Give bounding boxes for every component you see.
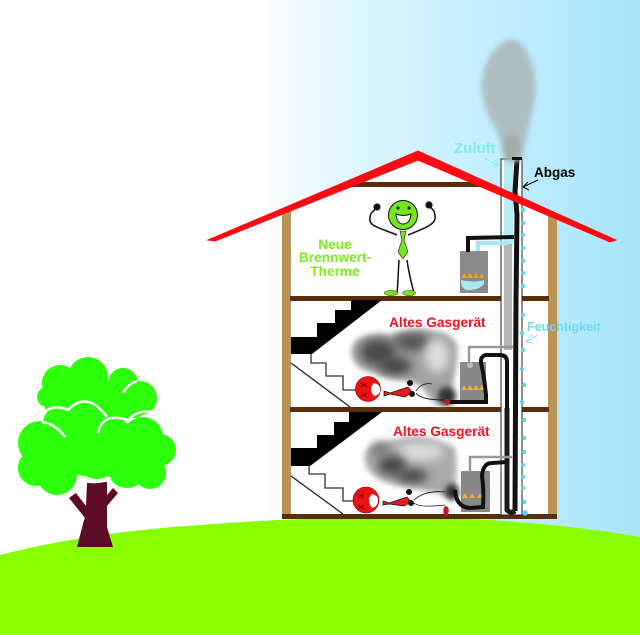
flames — [462, 493, 483, 498]
flue — [515, 159, 517, 511]
shoe — [444, 399, 450, 405]
black flue pipe — [445, 355, 507, 409]
arm — [416, 384, 445, 400]
upper-floor air pipe — [478, 243, 508, 254]
chimney — [478, 159, 522, 515]
tree trunk — [69, 482, 118, 547]
boiler body — [460, 251, 488, 293]
second flue — [507, 408, 515, 512]
tie — [383, 497, 411, 506]
ground hill — [0, 517, 640, 635]
black stair underside — [291, 412, 382, 466]
house — [282, 158, 557, 519]
sky background — [268, 0, 640, 540]
middle floor — [290, 407, 549, 412]
smoke plume — [482, 39, 536, 162]
zuluft label: Zuluft — [454, 140, 496, 157]
altes gasgerät label lower: Altes Gasgerät — [393, 424, 490, 439]
right wall — [548, 216, 557, 517]
flue cap — [512, 157, 522, 160]
head — [388, 200, 418, 230]
left wall — [282, 211, 291, 517]
condensate water — [461, 280, 484, 290]
upper floor — [290, 296, 549, 301]
heater body — [461, 471, 490, 512]
tree crown highlights — [42, 381, 155, 482]
smoke cloud — [365, 437, 459, 500]
mouth — [369, 494, 378, 508]
flames — [461, 273, 484, 278]
lower gas heater — [353, 437, 512, 516]
exhaust pipe — [468, 237, 514, 252]
legs — [397, 260, 414, 293]
arm — [414, 492, 445, 506]
moisture droplets — [520, 208, 528, 516]
neue brennwert-therme label: Therme — [310, 264, 360, 279]
dead eyes — [361, 383, 367, 397]
abgas label: Abgas — [534, 165, 575, 180]
black stair underside — [291, 300, 382, 354]
face — [356, 376, 380, 402]
altes gasgerät label upper: Altes Gasgerät — [389, 315, 486, 330]
house interior — [283, 158, 557, 517]
grey pipe — [470, 457, 512, 472]
face — [353, 487, 379, 513]
red body — [356, 376, 450, 405]
hands — [406, 489, 412, 495]
tie — [384, 387, 412, 397]
grey pipe — [469, 347, 513, 363]
stair outline — [311, 354, 356, 390]
upper staircase — [291, 300, 382, 407]
stick figure — [370, 200, 435, 296]
chimney body — [501, 159, 522, 515]
chimney air duct — [504, 160, 513, 245]
smile — [396, 214, 411, 224]
stair diagonal — [291, 363, 350, 407]
zuluft arrow — [484, 158, 499, 166]
abgas arrow — [523, 180, 538, 190]
feuchtigkeit label: Feuchtigkeit — [527, 320, 601, 334]
neue brennwert-therme label: Neue — [318, 237, 352, 252]
hands — [373, 203, 381, 211]
feuchtigkeit arrow — [526, 335, 538, 343]
dead eyes — [358, 494, 364, 509]
neue brennwert-therme label: Brennwert- — [299, 250, 372, 265]
black flue pipe — [455, 462, 507, 508]
ground floor — [282, 514, 557, 519]
chimney grey lining — [504, 244, 512, 350]
roof — [208, 151, 616, 242]
upper gas heater — [352, 330, 513, 409]
tree crown — [18, 357, 176, 495]
red body — [353, 487, 449, 516]
tree — [18, 357, 176, 547]
hands — [407, 380, 413, 386]
shoe — [443, 506, 449, 516]
shoes — [384, 290, 398, 296]
attic floor — [350, 182, 483, 187]
heater body — [460, 362, 486, 403]
stair outline — [309, 466, 354, 501]
new boiler — [460, 237, 514, 293]
arms — [370, 206, 435, 235]
flames — [461, 385, 484, 390]
smoke cloud — [352, 330, 457, 406]
mouth — [371, 383, 380, 396]
grey valve — [467, 362, 473, 368]
tie — [398, 231, 408, 259]
eyes — [396, 206, 400, 210]
stair diagonal — [291, 476, 343, 514]
lower staircase — [291, 412, 382, 514]
